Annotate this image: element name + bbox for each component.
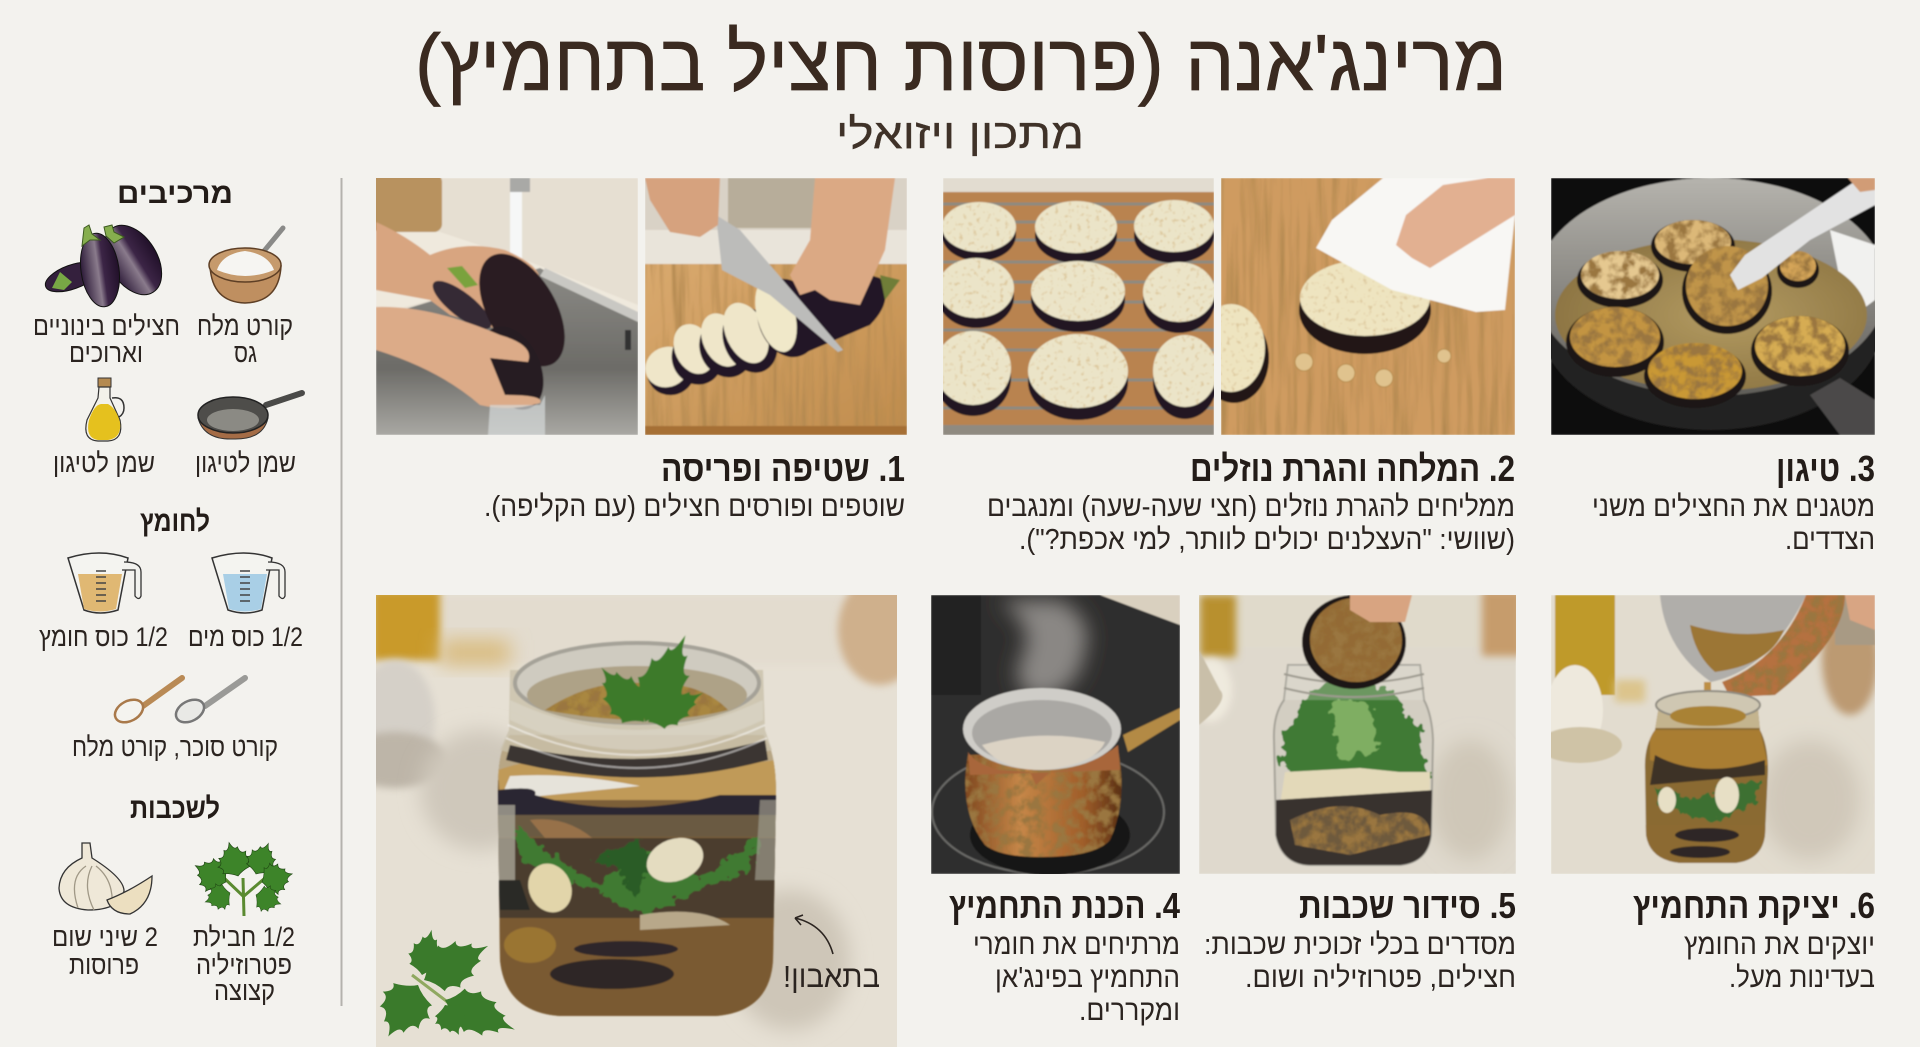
step 4 caption: ומקררים. — [1079, 995, 1180, 1027]
step 2 caption: 2. המלחה והגרת נוזלים — [1190, 448, 1515, 489]
step 2 caption — [987, 448, 1515, 556]
step 5 caption: חצילים, פטרוזיליה ושום. — [1245, 962, 1516, 994]
sidebar divider — [340, 178, 342, 1006]
parsley sprig — [380, 930, 515, 1036]
step 3 caption: הצדדים. — [1785, 524, 1875, 556]
step 3 caption — [1592, 448, 1875, 556]
heading: for the vinegar: לחומץ — [140, 506, 210, 538]
step 1 caption: 1. שטיפה ופריסה — [661, 448, 905, 489]
photo: boiling pickling liquid — [931, 595, 1180, 875]
icon: vinegar cup — [68, 553, 141, 613]
photo: finished jar — [376, 595, 897, 1047]
label: frying oil right: שמן לטיגון — [195, 448, 296, 478]
photo: frying slices in pan — [1535, 178, 1887, 435]
step 4 caption: 4. הכנת התחמיץ — [949, 885, 1180, 926]
text: bon appetit: בתאבון! — [783, 959, 880, 994]
label: parsley line 3: קצוצה — [214, 976, 275, 1006]
label: eggplants: חצילים בינוניים — [33, 311, 180, 341]
jar glass and contents — [495, 624, 780, 1016]
step 5 caption: 5. סידור שכבות — [1299, 885, 1516, 926]
photo: pouring liquid — [1538, 595, 1878, 874]
subtitle: מתכון ויזואלי — [836, 110, 1084, 157]
icon: salt bowl — [209, 228, 283, 303]
icon: frying pan — [198, 393, 302, 439]
arrow: to jar — [795, 915, 833, 954]
label: eggplants line 2: וארוכים — [69, 338, 143, 368]
step 6 caption: בעדינות מעל. — [1729, 962, 1875, 994]
label: frying oil left: שמן לטיגון — [53, 448, 155, 478]
step 3 caption: 3. טיגון — [1776, 448, 1875, 489]
photo: washing eggplants — [372, 174, 638, 435]
label: sugar and salt: קורט סוכר, קורט מלח — [72, 732, 278, 762]
step 5 caption: מסדרים בכלי זכוכית שכבות: — [1204, 929, 1516, 961]
label: garlic line 2: פרוסות — [69, 950, 139, 980]
heading: ingredients: מרכיבים — [117, 178, 233, 210]
label: coarse salt: קורט מלח — [197, 311, 293, 341]
step 4 caption: מרתיחים את חומרי — [973, 929, 1180, 961]
step 5 caption — [1204, 885, 1516, 994]
label: half bunch parsley: 1/2 חבילת — [193, 922, 295, 952]
step 2 caption: ממליחים להגרת נוזלים (חצי שעה-שעה) ומנגבים — [987, 491, 1515, 523]
step 4 caption — [949, 885, 1180, 1027]
label: parsley line 2: פטרוזיליה — [196, 950, 292, 980]
label: half cup water: 1/2 כוס מים — [188, 622, 303, 652]
photo: drying slices with towel — [1197, 178, 1515, 435]
photo: layering in jar — [1188, 590, 1522, 874]
label: coarse salt line 2: גס — [234, 338, 257, 368]
icon: oil bottle — [86, 378, 124, 441]
photo: slicing eggplant — [639, 178, 907, 435]
step 6 caption: 6. יציקת התחמיץ — [1633, 885, 1875, 926]
step 1 caption: שוטפים ופורסים חצילים (עם הקליפה). — [484, 491, 905, 523]
step 2 caption: (שוושי: "העצלנים יכולים לוותר, למי אכפת?"). — [1019, 524, 1515, 556]
step 4 caption: התחמיץ בפינג'אן — [995, 962, 1180, 994]
label: garlic: 2 שיני שום — [52, 922, 158, 952]
title: מרינג'אנה (פרוסות חציל בתחמיץ) — [415, 18, 1507, 107]
step 1 caption — [484, 448, 905, 523]
icon: spoons — [111, 678, 245, 727]
heading: for the layers: לשכבות — [130, 793, 220, 825]
icon: eggplants — [42, 215, 173, 309]
icon: parsley — [187, 838, 296, 917]
photo: salted slices on rack — [935, 178, 1217, 435]
icon: water cup — [212, 553, 285, 613]
panel: ingredients sidebar — [33, 178, 303, 1006]
parsley on jar — [601, 635, 703, 730]
label: half cup vinegar: 1/2 כוס חומץ — [39, 622, 168, 652]
icon: garlic — [59, 843, 152, 914]
step 6 caption: יוצקים את החומץ — [1684, 929, 1875, 961]
step 3 caption: מטגנים את החצילים משני — [1592, 491, 1875, 523]
step 6 caption — [1633, 885, 1875, 994]
